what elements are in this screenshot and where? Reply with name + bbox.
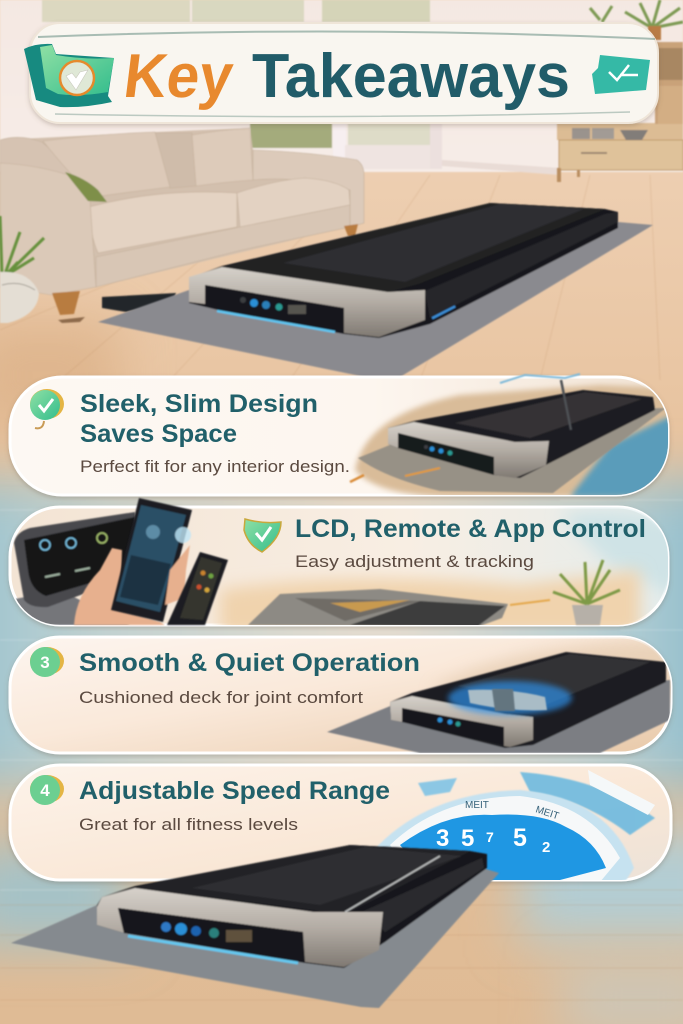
panel 3 body text: Cushioned deck for joint comfort: [79, 688, 363, 707]
panel 1: sleek slim design: [10, 374, 683, 497]
panel 2: LCD, remote and app control: [10, 498, 683, 635]
panel 1 heading: Sleek, Slim Design: [80, 390, 318, 418]
panel 3 image: treadmill with glowing motor: [327, 640, 680, 753]
icon: number badge 4: 4: [40, 781, 50, 800]
remote on floor: [58, 293, 176, 323]
panel 2 heading: LCD, Remote & App Control: [295, 515, 646, 543]
hand holding phone: [74, 548, 165, 625]
speed dial: 7: [486, 829, 494, 845]
panel 4: adjustable speed range: [10, 765, 671, 882]
bottom treadmill on mat: [11, 845, 499, 1008]
wand and spark: [500, 374, 580, 430]
mat: [11, 860, 499, 1008]
room wall and windows: [0, 0, 683, 175]
icon: number badge 4: [30, 775, 64, 805]
plant top right: [590, 0, 683, 40]
speed dial: MEIT: [465, 800, 489, 811]
icon: smartphone: [111, 498, 192, 622]
icon: potted plant: [553, 560, 620, 625]
panel 3 heading: Smooth & Quiet Operation: [79, 649, 420, 677]
speed dial: MEIT: [534, 804, 560, 822]
panel 2 background image: [10, 512, 683, 635]
speed dial: 5: [513, 824, 527, 852]
icon: check badge 1: [30, 389, 64, 428]
panel 3: smooth and quiet operation: [10, 637, 680, 753]
panel 2 body text: Easy adjustment & tracking: [295, 552, 534, 571]
speed dial: [372, 770, 655, 882]
icon: number badge 3: 3: [40, 653, 50, 672]
icon: check badge 2: [244, 519, 281, 552]
panel 1 heading: Saves Space: [80, 420, 237, 448]
panel 4 body text: Great for all fitness levels: [79, 815, 298, 834]
panel 1 image: treadmill on mat: [350, 385, 683, 497]
title banner: [24, 23, 658, 123]
title text: Key Takeaways: Takeaways: [252, 42, 570, 111]
treadmill, lower centre: [248, 589, 508, 626]
title text: Key Takeaways: [120, 42, 570, 111]
icon: remote control: [167, 552, 228, 625]
speed dial: 5: [461, 825, 474, 852]
panel 4 heading: Adjustable Speed Range: [79, 777, 390, 805]
icon: folder check left: [24, 44, 114, 107]
panel 1 heading: [80, 390, 318, 448]
sofa: [0, 128, 364, 315]
banner background: [30, 23, 658, 123]
shelf: [557, 42, 683, 182]
icon: number badge 3: [30, 647, 64, 677]
hero treadmill on rug: [98, 203, 653, 377]
speed dial: 2: [542, 839, 550, 856]
title text: Key Takeaways: Key: [120, 42, 237, 111]
icon: check badge right: [592, 55, 650, 94]
plant and pot left: [0, 216, 44, 323]
panel 1 body text: Perfect fit for any interior design.: [80, 457, 350, 476]
speed dial: 3: [436, 825, 449, 852]
motor glow: [448, 681, 572, 715]
